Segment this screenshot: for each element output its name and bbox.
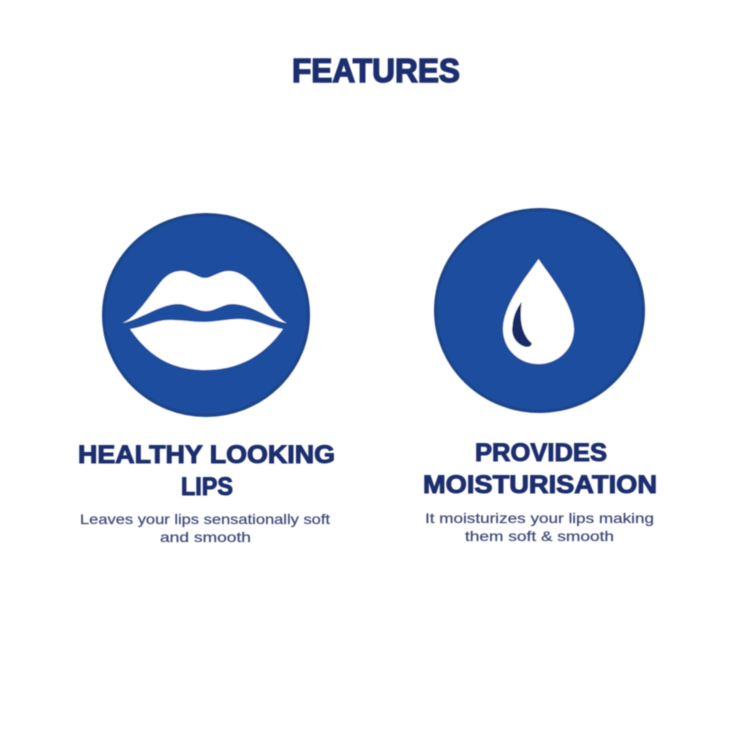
panel: healthy looking lips [78, 214, 335, 545]
icon: water drop in circle [436, 210, 644, 412]
text: moisture description [425, 510, 654, 544]
text: moisture description: It moisturizes your lips making [425, 510, 654, 526]
heading: provides moisturisation: MOISTURISATION [423, 471, 657, 499]
text: moisture description: them soft & smooth [465, 528, 614, 544]
panel: provides moisturisation [423, 210, 657, 544]
icon: lips in circle [104, 214, 308, 416]
heading: healthy looking lips: LIPS [181, 473, 233, 501]
heading: healthy looking lips [78, 441, 335, 501]
heading: provides moisturisation: PROVIDES [475, 439, 607, 467]
heading: healthy looking lips: HEALTHY LOOKING [78, 441, 335, 469]
text: lips description: and smooth [160, 529, 251, 545]
text: lips description [80, 511, 330, 545]
heading: provides moisturisation [423, 439, 657, 499]
title: FEATURES [292, 52, 460, 89]
text: lips description: Leaves your lips sensationally soft [80, 511, 330, 527]
